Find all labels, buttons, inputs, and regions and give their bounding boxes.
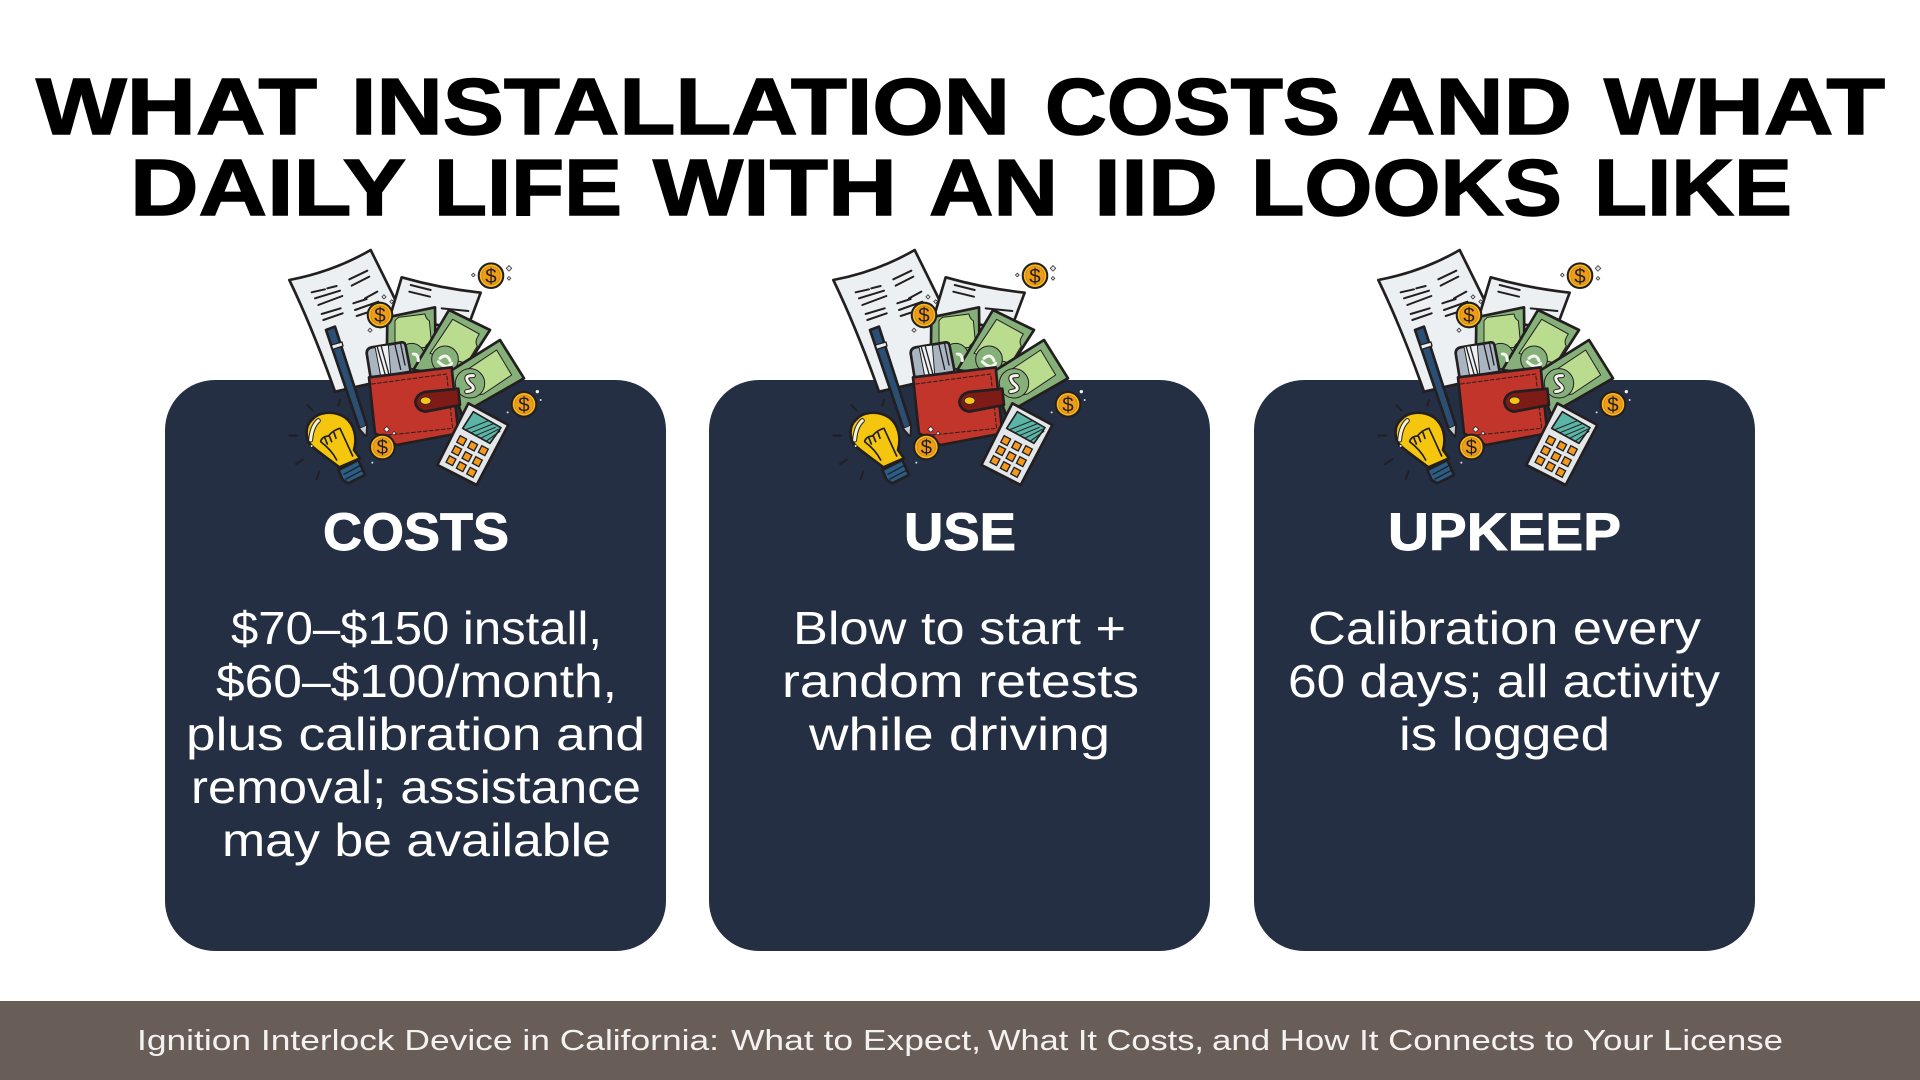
text block: use detail: while driving xyxy=(808,708,1110,760)
text block: costs detail: plus calibration and xyxy=(186,708,645,760)
text block: use detail xyxy=(782,602,1139,760)
text block: upkeep detail: Calibration every xyxy=(1308,602,1701,654)
text block: costs detail xyxy=(186,602,645,866)
title: WHAT xyxy=(36,62,317,151)
title: COSTS xyxy=(1045,62,1340,151)
title xyxy=(36,62,1885,232)
icon: wallet, bills and receipts xyxy=(1378,250,1631,485)
footer text: What to Expect, xyxy=(731,1025,981,1057)
title: DAILY xyxy=(130,143,406,232)
text block: costs detail: $70–$150 install, xyxy=(231,602,602,654)
text block: costs detail: $60–$100/month, xyxy=(216,655,617,707)
icon: wallet, bills and receipts xyxy=(289,250,542,485)
title: AND xyxy=(1367,62,1572,151)
title: IID xyxy=(1094,143,1218,232)
panel background: costs xyxy=(165,380,666,951)
heading: use: USE xyxy=(904,503,1016,562)
heading: costs: COSTS xyxy=(323,503,509,562)
text block: costs detail: may be available xyxy=(222,814,611,866)
text block: upkeep detail: is logged xyxy=(1399,708,1610,760)
panel: costs xyxy=(165,250,666,951)
text block: use detail: random retests xyxy=(782,655,1139,707)
panel background: upkeep xyxy=(1254,380,1755,951)
title: LIKE xyxy=(1594,143,1792,232)
icon: wallet, bills and receipts xyxy=(833,250,1086,485)
heading: upkeep: UPKEEP xyxy=(1388,503,1621,562)
text block: upkeep detail: 60 days; all activity xyxy=(1288,655,1720,707)
footer text: and How It Connects to Your License xyxy=(1212,1025,1783,1057)
footer text: What It Costs, xyxy=(988,1025,1204,1057)
title: LIFE xyxy=(434,143,622,232)
footer bar xyxy=(0,1001,1920,1080)
panel: upkeep xyxy=(1254,250,1755,951)
panel: use xyxy=(709,250,1210,951)
text block: upkeep detail xyxy=(1288,602,1720,760)
text block: costs detail: removal; assistance xyxy=(191,761,641,813)
title: LOOKS xyxy=(1251,143,1562,232)
title: INSTALLATION xyxy=(351,62,1010,151)
title: AN xyxy=(929,143,1058,232)
title: WITH xyxy=(653,143,897,232)
title: WHAT xyxy=(1604,62,1885,151)
footer text: Ignition Interlock Device in California: xyxy=(137,1025,719,1057)
panel background: use xyxy=(709,380,1210,951)
text block: use detail: Blow to start + xyxy=(793,602,1126,654)
footer text xyxy=(137,1025,1783,1057)
